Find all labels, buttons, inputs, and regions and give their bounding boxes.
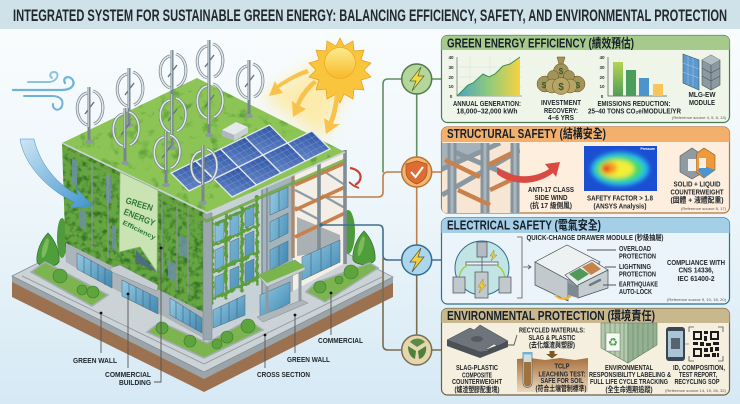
side wind label — [528, 185, 574, 210]
ground floor, left side — [66, 243, 207, 340]
building callout labels: COMMERCIAL — [318, 336, 364, 345]
tracking label: TEST REPORT, — [679, 370, 717, 379]
building callout labels: CROSS SECTION — [257, 370, 310, 379]
green energy banner: ENERGY — [122, 207, 157, 228]
arrow down — [546, 351, 558, 358]
wind load arrow — [497, 162, 560, 183]
soil with test tube — [517, 352, 588, 392]
panel: green energy efficiency — [442, 36, 730, 122]
bracket arrow — [517, 237, 531, 298]
drawer leader lines — [587, 250, 616, 285]
investment recovery label — [541, 98, 581, 122]
heading: ELECTRICAL SAFETY (電氣安全) — [447, 218, 601, 232]
rotation arrow — [349, 168, 361, 188]
bar chart: emissions — [599, 55, 667, 99]
title banner — [0, 0, 740, 29]
safety factor label: (ANSYS Analysis) — [594, 202, 647, 210]
building callout labels: GREEN WALL — [287, 355, 331, 364]
building callout labels: GREEN WALL — [73, 356, 118, 365]
icon: money bags — [537, 57, 585, 94]
vertical axis wind turbines — [77, 40, 263, 205]
investment recovery label: INVESTMENT — [541, 98, 581, 107]
safety factor label — [587, 194, 653, 210]
compliance text: IEC 61400-2 — [678, 274, 714, 283]
lifecycle label: RESPONSIBILITY LABELING & — [589, 370, 671, 379]
bar chart: emissions: 20 — [599, 75, 605, 80]
glass section — [262, 175, 293, 309]
node icon: electrical bolt — [402, 245, 432, 275]
steel frame illustration — [440, 143, 520, 213]
recycling container — [601, 323, 657, 363]
area chart: annual generation: 40 — [448, 55, 454, 60]
heading: STRUCTURAL SAFETY (結構安全) — [447, 126, 606, 141]
tracking label: ID, COMPOSITION, — [673, 363, 725, 372]
lifecycle label: (全生命週期追蹤) — [606, 385, 653, 394]
node icon: safety shield — [402, 157, 432, 187]
phone scanning icon — [666, 327, 690, 361]
entrance canopy, right side — [257, 260, 308, 322]
rooftop equipment box — [222, 122, 248, 141]
bar chart: emissions: 40 — [599, 55, 605, 60]
side wind label: SIDE WIND — [534, 193, 568, 202]
area chart: annual generation: 10 — [448, 84, 454, 89]
exposed structural frame — [293, 150, 345, 291]
heading: GREEN ENERGY EFFICIENCY (績效預估) — [447, 36, 634, 50]
lifecycle label — [589, 363, 671, 394]
TCLP label: TCLP — [554, 362, 570, 370]
panel: structural safety — [440, 126, 730, 213]
area chart: annual generation: 20 — [448, 75, 454, 80]
protection labels: LIGHTNING — [619, 262, 651, 271]
module label — [688, 90, 716, 107]
sun with rays and light beams — [262, 38, 371, 140]
investment recovery label: RECOVERY: — [544, 106, 578, 115]
panel: environmental protection — [442, 308, 730, 395]
emissions label — [588, 99, 682, 116]
lifecycle label: ENVIRONMENTAL — [605, 363, 653, 372]
recycling container: ♻ — [608, 336, 618, 349]
counterweight label: COMPOSITE — [462, 370, 492, 380]
area chart: annual generation — [448, 55, 522, 99]
solar panel array — [171, 125, 330, 197]
counterweight label — [452, 363, 502, 394]
drawer module illustration — [535, 245, 608, 301]
counterweight label: COUNTERWEIGHT — [670, 188, 724, 196]
green energy banner: Efficiency — [121, 220, 157, 242]
counterweight label: SOLID + LIQUID — [674, 180, 721, 188]
QR code — [689, 327, 723, 361]
heading: ENVIRONMENTAL PROTECTION (環境責任) — [447, 308, 655, 323]
TCLP label: SAFE FOR SOIL — [540, 376, 584, 385]
counterweight label: (爐渣塑膠配重塊) — [454, 385, 500, 394]
protection labels: AUTO-LOCK — [619, 287, 653, 296]
reference note: (Reference source 8, 17) — [681, 206, 727, 211]
counterweight label: COUNTERWEIGHT — [452, 377, 502, 386]
reference note: (Reference source 9, 10, 18, 20) — [667, 297, 727, 302]
lifecycle label: FULL LIFE CYCLE TRACKING — [590, 377, 668, 386]
icon: money bags: $ — [558, 82, 564, 93]
building callout labels: COMMERCIAL — [105, 370, 152, 379]
icon: solid and liquid counterweight — [680, 148, 715, 179]
emissions label: EMISSIONS REDUCTION: — [598, 99, 670, 108]
building — [62, 143, 345, 340]
compliance text: CNS 14336, — [678, 266, 714, 274]
green wall facade — [62, 143, 207, 340]
area chart: annual generation: 0 — [450, 94, 453, 99]
wind swirl icon — [13, 72, 74, 110]
area chart: annual generation: 30 — [448, 65, 454, 70]
side wind label: (抗 17 級側風) — [530, 201, 572, 210]
TCLP label: (符合土壤管制標準) — [536, 384, 587, 393]
panel: electrical safety — [442, 218, 730, 304]
power system diagram — [453, 241, 511, 298]
bar chart: emissions: 10 — [599, 84, 605, 89]
TCLP label — [536, 362, 587, 393]
investment recovery label: 4–6 YRS — [548, 113, 574, 122]
planters — [31, 262, 378, 358]
compliance text: COMPLIANCE WITH — [667, 258, 725, 267]
protection labels: PROTECTION — [619, 252, 656, 260]
building callout labels: BUILDING — [119, 378, 151, 387]
icon: money bags: $ — [559, 67, 564, 76]
icon: composite counterweight — [447, 325, 517, 358]
reference note: (Reference source 4, 5, 8, 13) — [672, 115, 727, 120]
safety factor label: SAFETY FACTOR > 1.8 — [587, 194, 653, 202]
connector lines — [319, 79, 441, 350]
tracking label — [673, 363, 725, 386]
counterweight label: (固體 + 液體配重) — [670, 196, 724, 204]
green energy banner: GREEN — [124, 195, 154, 213]
counterweight label: SLAG-PLASTIC — [456, 363, 499, 372]
ground platform — [12, 180, 393, 392]
protection labels — [619, 244, 658, 296]
node icon: efficiency bolt — [402, 64, 432, 94]
recycled materials label: SLAG & PLASTIC — [528, 333, 576, 342]
green energy banner — [119, 172, 158, 272]
icon: money bags: $ — [542, 81, 547, 90]
annual generation label: ANNUAL GENERATION: — [453, 99, 521, 108]
protection labels: OVERLOAD — [619, 244, 651, 253]
counterweight label — [670, 180, 724, 204]
tracking label: RECYCLING SOP — [674, 377, 720, 386]
recycled materials label: (去化爐渣與塑膠) — [529, 340, 575, 350]
emissions label: 25–40 TONS CO₂e/MODULE/YR — [588, 106, 682, 116]
TCLP label: LEACHING TEST: — [538, 370, 586, 378]
module label: MLG-EW — [688, 90, 716, 99]
bar chart: emissions: 0 — [601, 94, 604, 99]
recycled materials label: RECYCLED MATERIALS: — [519, 326, 585, 334]
compliance text — [667, 258, 725, 283]
building callout labels — [73, 247, 364, 387]
wind arrow into building — [20, 139, 93, 208]
trees — [37, 210, 375, 274]
side wind label: ANTI-17 CLASS — [528, 185, 574, 194]
vine covered glass section — [203, 189, 262, 340]
icon: MLG-EW module — [683, 54, 720, 90]
pressure heat map: Pressure — [640, 147, 655, 151]
module label: MODULE — [689, 98, 715, 107]
green roof — [62, 78, 345, 221]
bar chart: emissions: 30 — [599, 65, 605, 70]
protection labels: PROTECTION — [619, 270, 656, 278]
protection labels: EARTHQUAKE — [619, 280, 658, 288]
reference note: (Reference source 14, 19, 26, 32) — [665, 388, 727, 393]
pressure heat map — [584, 146, 657, 191]
drawer module heading: QUICK-CHANGE DRAWER MODULE (秒級抽屜) — [526, 233, 664, 242]
icon: money bags: $ — [576, 81, 581, 90]
annual generation label — [453, 99, 521, 116]
recycled materials label — [519, 326, 585, 350]
annual generation label: 18,000–32,000 kWh — [456, 106, 518, 116]
node icon: recycling leaves — [402, 335, 432, 365]
